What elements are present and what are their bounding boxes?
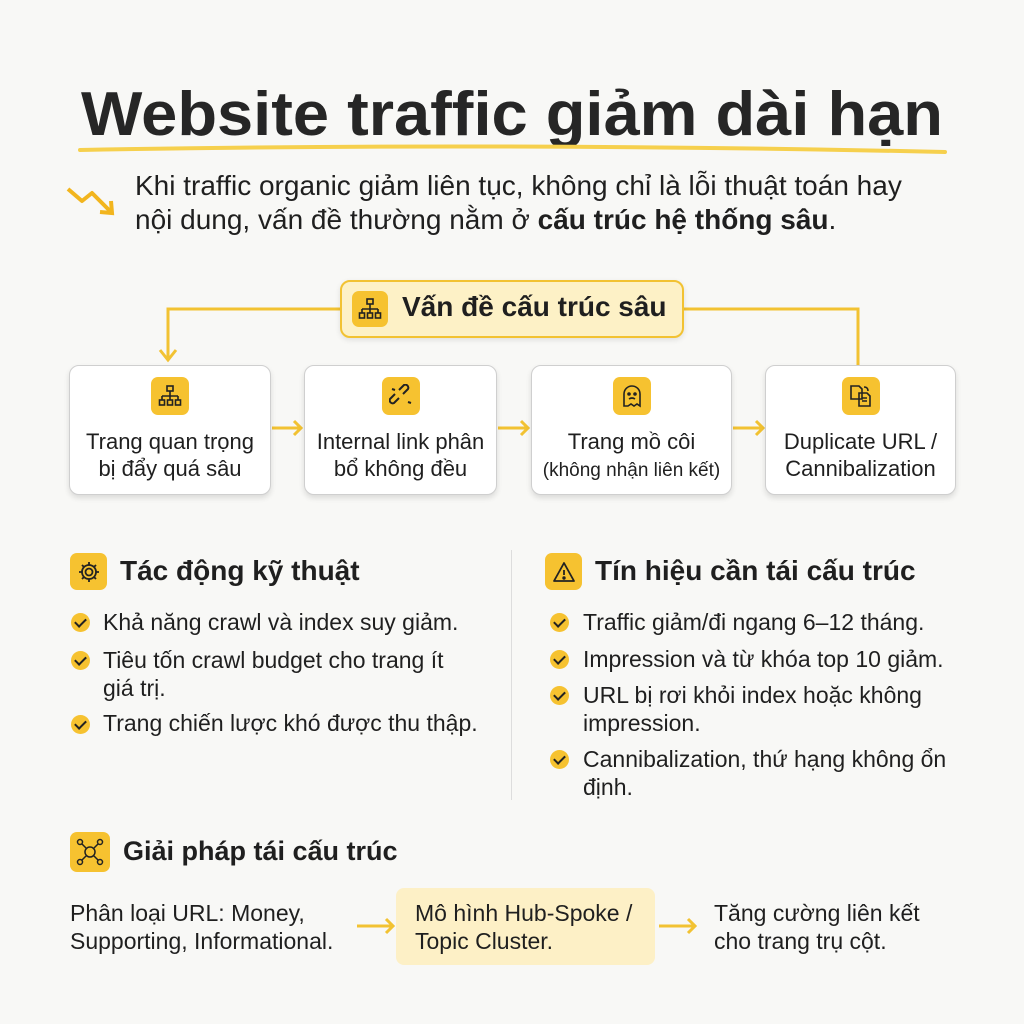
bullets: định.: [583, 774, 633, 800]
bullets: Impression và từ khóa top 10 giảm.: [583, 646, 944, 672]
heading: Tín hiệu cần tái cấu trúc: [595, 555, 916, 586]
box: internal link: bổ không đều: [334, 456, 467, 481]
subtitle: nội dung, vấn đề thường nằm ở cấu trúc hệ thống sâu.: [135, 204, 836, 235]
step 3: cho trang trụ cột.: [714, 928, 887, 954]
icon: ghost: [612, 377, 650, 415]
subtitle: Khi traffic organic giảm liên tục, không chỉ là lỗi thuật toán hay: [135, 170, 902, 201]
box: trang mồ côi: [531, 365, 732, 495]
section: tác động kỹ thuật: [70, 553, 478, 736]
icon: network: [70, 832, 110, 872]
bullets: Khả năng crawl và index suy giảm.: [103, 609, 458, 635]
bullets: impression.: [583, 710, 701, 736]
bullets: giá trị.: [103, 675, 166, 701]
box: duplicate URL: Cannibalization: [785, 456, 936, 481]
step 3: Tăng cường liên kết: [714, 900, 920, 926]
box: trang mồ côi: Trang mồ côi: [568, 429, 695, 454]
box: trang quan trọng: bị đẩy quá sâu: [98, 456, 242, 481]
box: duplicate URL: [765, 365, 956, 495]
bullets: Traffic giảm/đi ngang 6–12 tháng.: [583, 609, 924, 635]
main header: Vấn đề cấu trúc sâu: Vấn đề cấu trúc sâu: [402, 291, 667, 322]
heading: Tác động kỹ thuật: [120, 555, 360, 586]
step 1: [70, 900, 333, 954]
icon: warning: [545, 553, 582, 590]
main header: Vấn đề cấu trúc sâu: [340, 280, 684, 338]
icon: broken link: [382, 377, 420, 415]
section: giải pháp: [70, 832, 920, 965]
box: trang mồ côi: (không nhận liên kết): [543, 460, 720, 481]
bullets: [71, 609, 478, 736]
arrow: [659, 918, 697, 934]
box: trang quan trọng: [69, 365, 271, 495]
icon: trending down arrow: [66, 188, 114, 216]
icon: duplicate docs: [842, 377, 880, 415]
bullets: [550, 609, 946, 800]
box: trang quan trọng: Trang quan trọng: [86, 429, 254, 454]
step 2 box: [396, 888, 655, 965]
bullets: Tiêu tốn crawl budget cho trang ít: [103, 647, 444, 673]
connector lines: [158, 308, 860, 436]
bullets: Trang chiến lược khó được thu thập.: [103, 710, 478, 736]
arrow: [357, 918, 395, 934]
step 2 box: Mô hình Hub-Spoke /: [415, 900, 632, 926]
heading: Giải pháp tái cấu trúc: [123, 836, 398, 866]
icon: sitemap: [352, 291, 388, 327]
bullets: Cannibalization, thứ hạng không ổn: [583, 746, 946, 772]
title: Website traffic giảm dài hạn: [81, 80, 943, 149]
bullets: URL bị rơi khỏi index hoặc không: [583, 682, 922, 708]
icon: sitemap: [151, 377, 189, 415]
step 3: [714, 900, 920, 954]
box: duplicate URL: Duplicate URL /: [784, 429, 937, 454]
subtitle: [135, 170, 902, 235]
step 1: Phân loại URL: Money,: [70, 900, 305, 926]
section: tín hiệu cần tái cấu trúc: [545, 553, 946, 800]
box: internal link: [304, 365, 497, 495]
step 1: Supporting, Informational.: [70, 928, 333, 954]
box: internal link: Internal link phân: [317, 429, 484, 454]
step 2 box: Topic Cluster.: [415, 928, 553, 954]
icon: gear: [70, 553, 107, 590]
